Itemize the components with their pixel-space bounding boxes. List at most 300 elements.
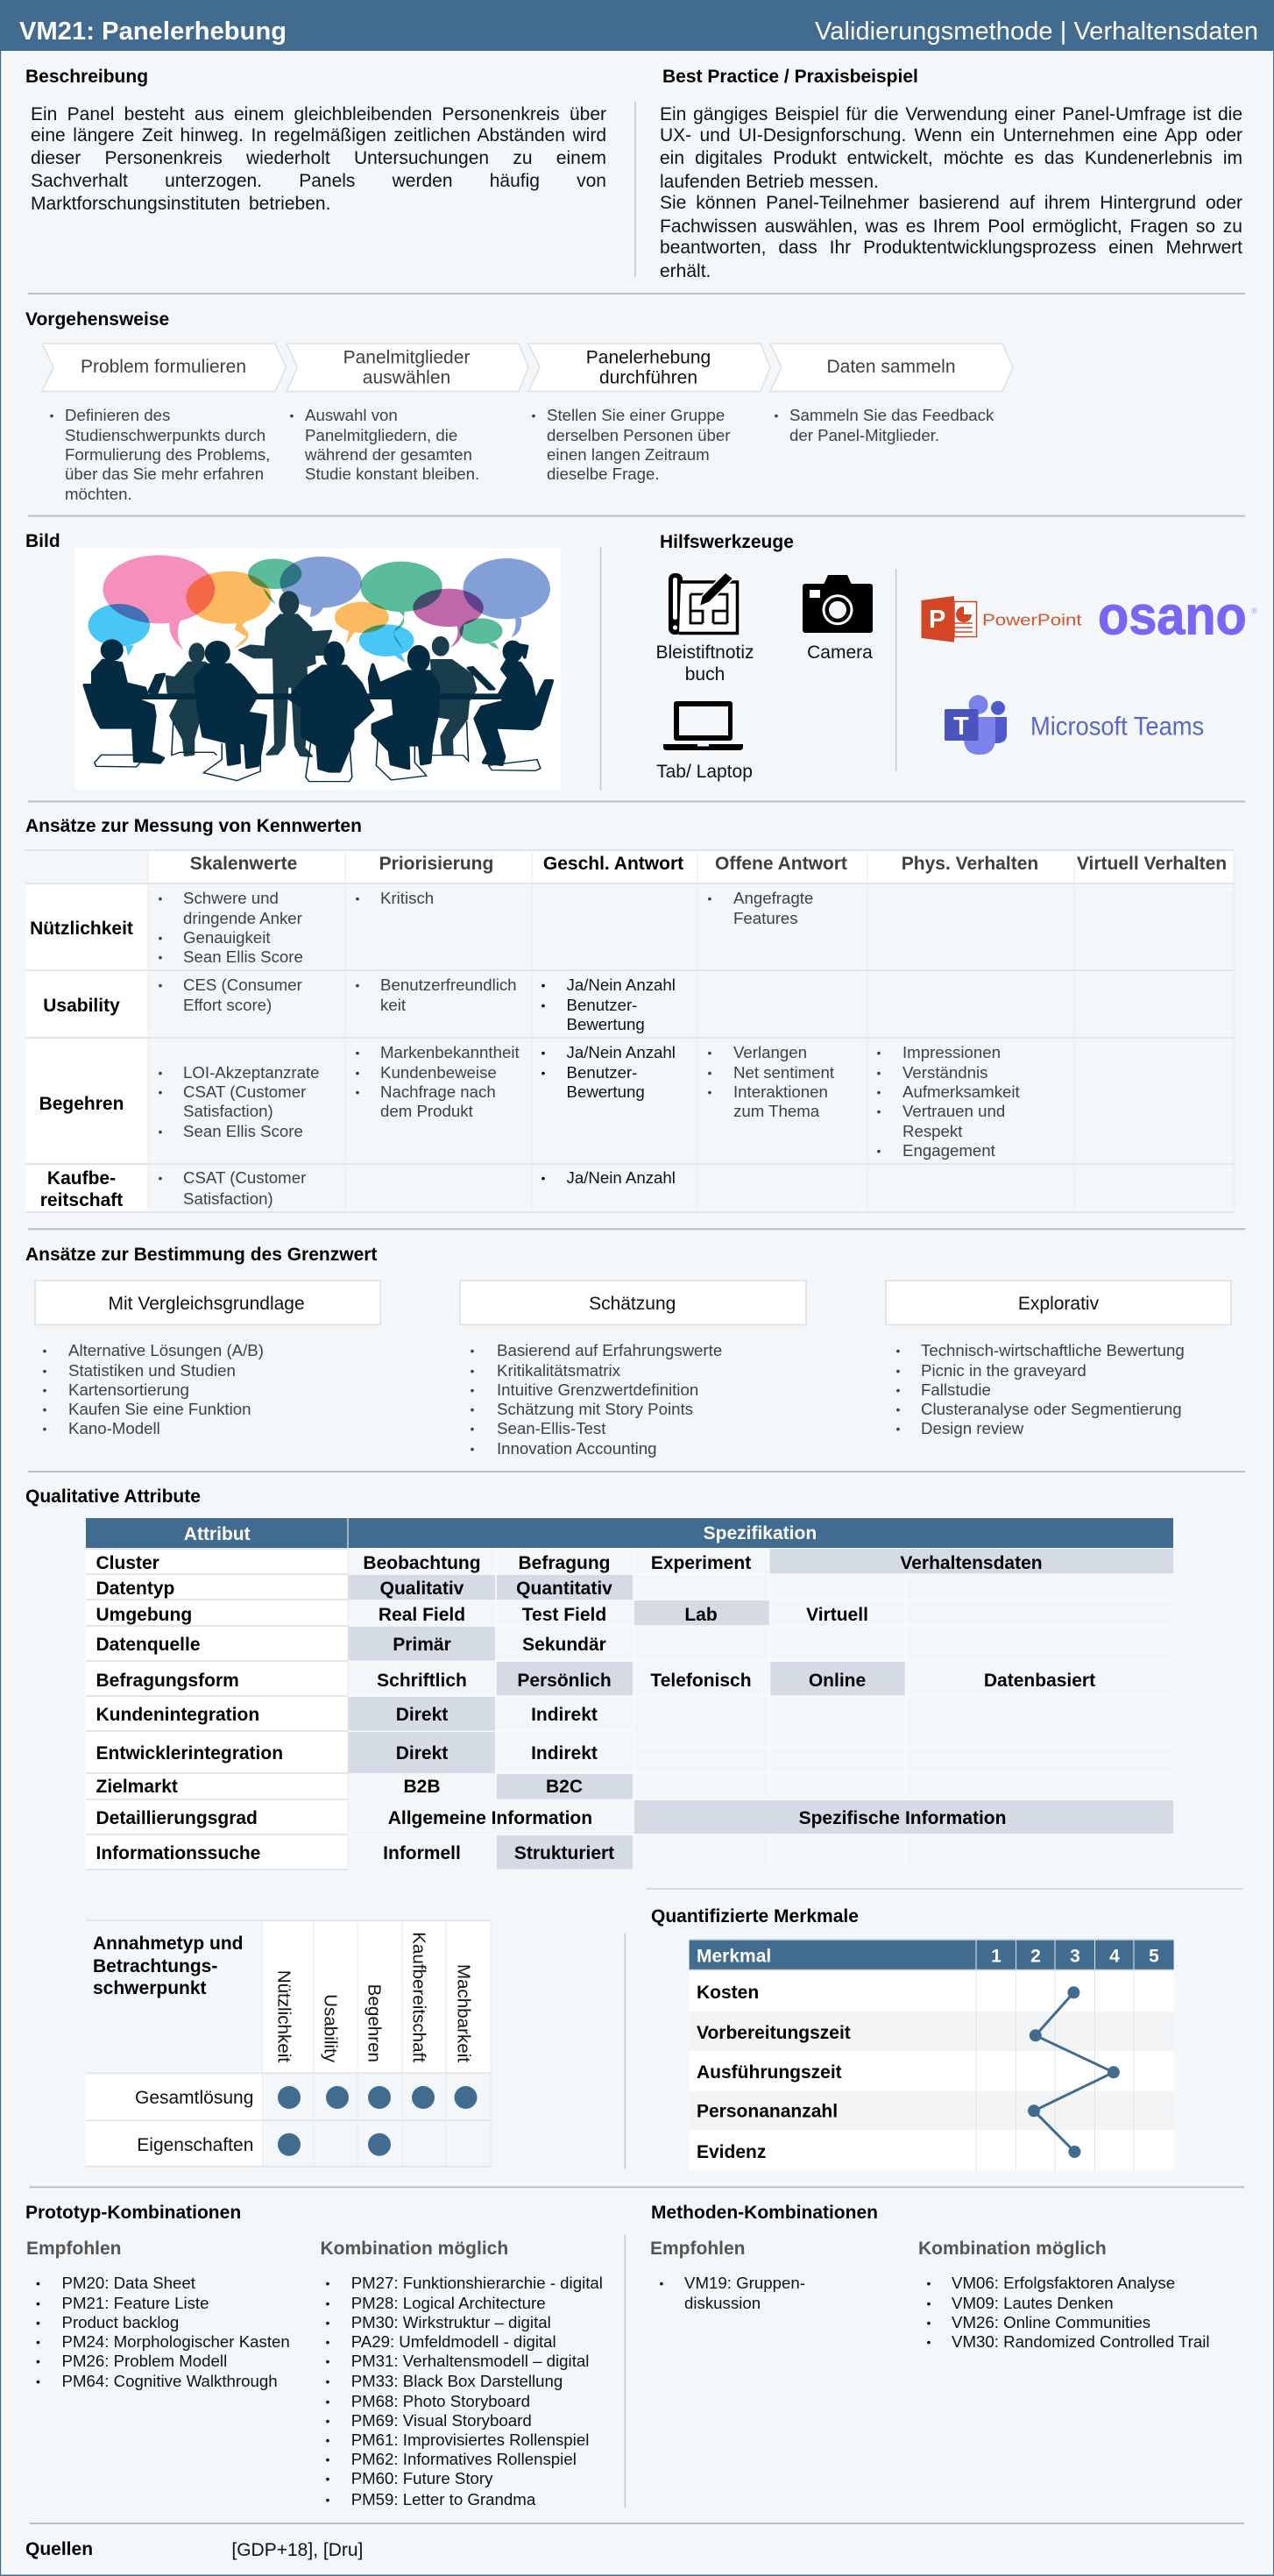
process chevrons: Problem formulieren xyxy=(81,357,246,377)
table: measurement approaches: Verlangen xyxy=(733,1043,807,1061)
list: Kombination möglich: • xyxy=(326,2452,329,2466)
table: measurement approaches: Benutzer- xyxy=(566,1063,637,1082)
table: attributes and specifications: Strukturiert xyxy=(514,1843,614,1863)
table: measurement approaches: Ja/Nein Anzahl xyxy=(566,1168,676,1187)
list: Kombination möglich: • xyxy=(326,2493,329,2507)
table: attributes and specifications: Datentyp xyxy=(96,1579,174,1599)
label: Bleistiftnotizbuch: Bleistiftnotiz xyxy=(655,642,754,663)
column: Explorativ: Explorativ xyxy=(1018,1294,1100,1314)
illustration: meeting silhouettes with speech bubbles xyxy=(75,548,561,790)
table: attributes and specifications: Indirekt xyxy=(531,1705,598,1725)
panel: Quantifizierte Merkmale xyxy=(651,1906,1174,2171)
column: Explorativ: Clusteranalyse oder Segmentierung xyxy=(921,1400,1182,1418)
column: Explorativ xyxy=(886,1281,1231,1437)
table: measurement approaches: dringende Anker xyxy=(183,909,302,927)
header bar xyxy=(0,0,1274,51)
list: Kombination möglich: VM09: Lautes Denken xyxy=(952,2294,1114,2312)
column: Schätzung xyxy=(460,1281,806,1458)
table: measurement approaches: • xyxy=(158,950,163,964)
table: attributes and specifications: Sekundär xyxy=(522,1635,606,1655)
column: Schätzung: • xyxy=(470,1383,475,1397)
column: Explorativ: • xyxy=(895,1422,901,1436)
table: attributes and specifications: Direkt xyxy=(396,1705,448,1725)
table: measurement approaches: Sean Ellis Score xyxy=(183,1122,303,1140)
table: attributes and specifications: Spezifische Information xyxy=(799,1808,1006,1828)
logo: Microsoft Teams xyxy=(945,695,1204,755)
step details: Auswahl von xyxy=(305,406,398,424)
table: attributes and specifications: Primär xyxy=(393,1635,451,1655)
step details: während der gesamten xyxy=(304,445,472,464)
list: Kombination möglich: PM28: Logical Architecture xyxy=(351,2294,546,2312)
table: measurement approaches: • xyxy=(541,978,545,992)
row: Gesamtlösung: Gesamtlösung xyxy=(135,2088,253,2108)
list: Kombination möglich: • xyxy=(927,2335,931,2349)
chart table: Merkmal ratings: Evidenz xyxy=(697,2142,766,2162)
table: measurement approaches: • xyxy=(356,1066,359,1080)
list: Empfohlen: VM19: Gruppen- xyxy=(684,2274,805,2292)
table: measurement approaches: Virtuell Verhalten xyxy=(1077,854,1227,874)
table: measurement approaches: Effort score) xyxy=(183,996,272,1014)
table: measurement approaches: Sean Ellis Score xyxy=(183,947,303,966)
table: measurement approaches: Satisfaction) xyxy=(183,1102,273,1120)
logo: Microsoft Teams: T xyxy=(953,713,969,741)
column: Schätzung: • xyxy=(470,1364,475,1378)
table: attributes and specifications: Qualitativ xyxy=(380,1579,464,1599)
row: Gesamtlösung xyxy=(135,2086,477,2109)
panel: Beschreibung: dieser Personenkreis wiederholt Untersuchungen zu einem xyxy=(31,148,606,168)
heading: Ansätze zur Bestimmung: Ansätze zur Bestimmung des Grenzwert xyxy=(25,1245,377,1265)
table: measurement approaches: Markenbekanntheit xyxy=(380,1043,520,1061)
table: attributes and specifications: Real Field xyxy=(379,1605,465,1625)
table: measurement approaches: • xyxy=(876,1066,881,1080)
column: Schätzung: • xyxy=(470,1442,475,1456)
panel: Beschreibung: Marktforschungsinstituten xyxy=(31,194,240,214)
panel: Bild xyxy=(25,531,561,790)
rotated column labels: Nützlichkeit xyxy=(273,1970,294,2062)
label: Camera: Camera xyxy=(807,642,873,663)
step details: Formulierung des Problems, xyxy=(65,445,270,464)
list: Empfohlen: diskussion xyxy=(684,2294,761,2312)
table: attributes and specifications: Quantitativ xyxy=(516,1579,612,1599)
list: Kombination möglich: • xyxy=(326,2335,329,2349)
list: Kombination möglich: • xyxy=(326,2414,329,2428)
table: measurement approaches: Skalenwerte xyxy=(190,854,297,874)
list: Kombination möglich xyxy=(321,2239,603,2509)
icon: blueprint notebook xyxy=(669,572,738,635)
step details: möchten. xyxy=(65,485,132,503)
table: measurement approaches: • xyxy=(158,931,163,945)
table: attributes and specifications: Kundenintegration xyxy=(96,1705,259,1725)
list: Empfohlen: Product backlog xyxy=(61,2313,179,2331)
list: Empfohlen: Empfohlen xyxy=(26,2239,121,2259)
chart table: Merkmal ratings: 2 xyxy=(1030,1946,1041,1967)
table: measurement approaches: dem Produkt xyxy=(380,1102,474,1120)
table: attributes and specifications: Datenbasiert xyxy=(984,1671,1095,1691)
table: attributes and specifications: Umgebung xyxy=(96,1605,192,1625)
column: Mit Vergleichsgrundlage: Kartensortierung xyxy=(68,1380,189,1399)
table: attributes and specifications: Detaillierungsgrad xyxy=(96,1808,258,1828)
step details: • xyxy=(775,408,778,422)
table: measurement approaches: Benutzerfreundlich xyxy=(380,976,517,994)
table: attributes and specifications: Schriftlich xyxy=(377,1671,467,1691)
column: Mit Vergleichsgrundlage: • xyxy=(42,1402,47,1416)
table: attributes and specifications: Attribut xyxy=(184,1524,251,1544)
table: measurement approaches: Verständnis xyxy=(902,1063,988,1082)
list: Kombination möglich: VM06: Erfolgsfaktoren Analyse xyxy=(952,2274,1175,2292)
column: Mit Vergleichsgrundlage: • xyxy=(42,1422,47,1436)
table: measurement approaches: Schwere und xyxy=(183,889,279,907)
column: Mit Vergleichsgrundlage: • xyxy=(42,1344,47,1358)
label: Bleistiftnotizbuch: buch xyxy=(685,664,725,685)
table: attributes and specifications: Experiment xyxy=(651,1553,751,1573)
table: attributes and specifications: Datenquelle xyxy=(96,1635,201,1655)
table: attributes and specifications: Befragung xyxy=(519,1553,610,1573)
header bar: Validierungsmethode | Verhaltensdaten xyxy=(815,18,1258,46)
icon: laptop xyxy=(663,701,743,750)
table: measurement approaches: CSAT (Customer xyxy=(183,1082,306,1101)
step details xyxy=(49,406,994,503)
table: attributes and specifications: Lab xyxy=(684,1605,718,1625)
step details: • xyxy=(531,408,536,422)
column: Schätzung: Kritikalitätsmatrix xyxy=(497,1361,621,1380)
process chevrons: durchführen xyxy=(599,368,697,387)
list: Kombination möglich: • xyxy=(326,2296,329,2310)
table: measurement approaches: reitschaft xyxy=(40,1190,123,1210)
list: Kombination möglich: • xyxy=(326,2316,329,2330)
step details: einen langen Zeitraum xyxy=(547,445,710,464)
table title: Betrachtungs- xyxy=(93,1956,217,1976)
panel: Beschreibung: Beschreibung xyxy=(25,67,148,87)
list: Empfohlen: PM24: Morphologischer Kasten xyxy=(61,2332,290,2351)
panel: Quellen: Quellen xyxy=(25,2539,93,2559)
list: Kombination möglich: • xyxy=(927,2276,931,2290)
table: measurement approaches: • xyxy=(541,1046,545,1060)
table title xyxy=(93,1934,244,1998)
step details: Studienschwerpunkts durch xyxy=(65,426,265,444)
list: Empfohlen: • xyxy=(36,2276,40,2290)
list: Kombination möglich: • xyxy=(326,2395,329,2409)
step details: der Panel-Mitglieder. xyxy=(789,426,939,444)
column: Schätzung: • xyxy=(470,1422,475,1436)
chart table: Merkmal ratings xyxy=(690,1940,1174,2171)
logo: PowerPoint xyxy=(922,596,1082,642)
panel: Best Practice: Ein gängiges Beispiel für die Verwendung einer Panel-Umfrage ist die xyxy=(660,104,1242,124)
row: Eigenschaften: Eigenschaften xyxy=(137,2135,253,2155)
heading: Quantifizierte Merkmale: Quantifizierte Merkmale xyxy=(651,1906,859,1927)
list: Kombination möglich: Kombination möglich xyxy=(918,2239,1107,2259)
table: measurement approaches: Genauigkeit xyxy=(183,928,271,947)
list: Empfohlen: • xyxy=(36,2374,40,2388)
list: Empfohlen: PM20: Data Sheet xyxy=(61,2274,196,2292)
list: Kombination möglich: PM59: Letter to Grandma xyxy=(351,2490,536,2509)
rotated column labels: Machbarkeit xyxy=(454,1964,473,2062)
panel: Best Practice: Best Practice / Praxisbeispiel xyxy=(662,67,918,87)
chart table: Merkmal ratings: 3 xyxy=(1070,1946,1080,1967)
table: measurement approaches: Net sentiment xyxy=(733,1063,835,1082)
list: Kombination möglich: PA29: Umfeldmodell - digital xyxy=(351,2332,556,2351)
column: Mit Vergleichsgrundlage: Kaufen Sie eine Funktion xyxy=(68,1400,251,1418)
process chevrons: Panelmitglieder xyxy=(343,347,470,368)
table: measurement approaches: Phys. Verhalten xyxy=(902,854,1038,874)
list: Kombination möglich: • xyxy=(326,2374,329,2388)
chart table: Merkmal ratings: 5 xyxy=(1149,1946,1159,1967)
table: attributes and specifications: Entwicklerintegration xyxy=(96,1743,283,1763)
panel: Quellen xyxy=(25,2539,363,2560)
table: measurement approaches: Kundenbeweise xyxy=(380,1063,497,1082)
table: measurement approaches: • xyxy=(158,978,163,992)
chart table: Merkmal ratings: Kosten xyxy=(697,1983,759,2003)
table title: Annahmetyp und xyxy=(93,1934,244,1954)
table: measurement approaches: keit xyxy=(380,996,407,1014)
table: measurement approaches: CSAT (Customer xyxy=(183,1168,306,1187)
heading: Qualitative Attribute: Qualitative Attribute xyxy=(25,1487,201,1507)
table: measurement approaches: Nachfrage nach xyxy=(380,1082,496,1101)
process chevrons: Panelerhebung xyxy=(586,347,711,368)
list: Empfohlen xyxy=(26,2239,290,2390)
list: Kombination möglich: Kombination möglich xyxy=(321,2239,508,2259)
panel: Ansätze zur Messung von Kennwerten xyxy=(25,816,1234,1212)
table: attributes and specifications: Beobachtung xyxy=(363,1553,481,1573)
panel: Best Practice: laufenden Betrieb messen. xyxy=(660,172,879,192)
column: Explorativ: • xyxy=(895,1364,901,1378)
process chevrons: Daten sammeln xyxy=(826,357,956,377)
column: Schätzung: Sean-Ellis-Test xyxy=(497,1419,606,1437)
list: Kombination möglich: • xyxy=(326,2472,329,2486)
list: Empfohlen: • xyxy=(36,2335,40,2349)
table: measurement approaches: • xyxy=(541,1066,545,1080)
column: Explorativ: • xyxy=(895,1402,901,1416)
list: Kombination möglich xyxy=(918,2239,1209,2351)
step details: dieselbe Frage. xyxy=(547,465,660,483)
table: measurement approaches: Vertrauen und xyxy=(902,1102,1005,1120)
table: measurement approaches: • xyxy=(876,1085,881,1099)
panel: Qualitative Attribute xyxy=(25,1487,1173,1870)
panel: Beschreibung xyxy=(25,67,606,214)
list: Kombination möglich: • xyxy=(927,2316,931,2330)
panel: Ansätze zur Bestimmung des Grenzwert xyxy=(25,1245,1231,1458)
heading: Hilfswerkzeuge: Hilfswerkzeuge xyxy=(660,532,794,552)
list: Kombination möglich: PM33: Black Box Darstellung xyxy=(351,2372,563,2390)
panel: Annahmetyp und Betrachtungsschwerpunkt xyxy=(86,1920,491,2167)
heading: Prototyp-Kombinationen: Prototyp-Kombinationen xyxy=(25,2203,241,2223)
table: measurement approaches: Usability xyxy=(43,996,120,1016)
column: Explorativ: • xyxy=(895,1383,901,1397)
table: measurement approaches: • xyxy=(708,1085,711,1099)
table: measurement approaches: • xyxy=(356,978,359,992)
process chevrons: auswählen xyxy=(363,368,450,387)
table: attributes and specifications: Informell xyxy=(383,1843,461,1863)
column: Schätzung: • xyxy=(470,1344,475,1358)
table: measurement approaches: Nützlichkeit xyxy=(30,919,133,939)
list: Kombination möglich: PM62: Informatives Rollenspiel xyxy=(351,2450,577,2468)
column: Mit Vergleichsgrundlage xyxy=(35,1281,380,1437)
table: measurement approaches: • xyxy=(708,891,711,905)
label: Tab/ Laptop: Tab/ Laptop xyxy=(656,762,753,782)
table: measurement approaches: • xyxy=(356,891,359,905)
chart table: Merkmal ratings: Personananzahl xyxy=(697,2102,838,2122)
table: measurement approaches: Begehren xyxy=(39,1094,124,1114)
heading: Vorgehensweise: Vorgehensweise xyxy=(25,309,169,330)
list: Empfohlen: Empfohlen xyxy=(650,2239,745,2259)
column: Mit Vergleichsgrundlage: • xyxy=(42,1364,47,1378)
table: attributes and specifications: Verhaltensdaten xyxy=(900,1553,1043,1573)
header bar: VM21: Panelerhebung xyxy=(19,18,287,46)
column: Explorativ: Picnic in the graveyard xyxy=(921,1361,1086,1380)
list: Empfohlen: • xyxy=(659,2276,664,2290)
list: Empfohlen: PM21: Feature Liste xyxy=(61,2294,209,2312)
panel: Hilfswerkzeuge xyxy=(655,532,873,782)
logo: PowerPoint: PowerPoint xyxy=(982,612,1082,629)
column: Explorativ: • xyxy=(895,1344,901,1358)
panel: Best Practice: ein digitales Produkt entwickelt, möchte es das Kundenerlebnis im xyxy=(660,148,1242,168)
column: Mit Vergleichsgrundlage: Mit Vergleichsgrundlage xyxy=(109,1294,305,1314)
column: Schätzung: Intuitive Grenzwertdefinition xyxy=(497,1380,698,1399)
logo: Microsoft Teams: Microsoft Teams xyxy=(1030,712,1204,742)
table: attributes and specifications: Test Field xyxy=(522,1605,606,1625)
table: measurement approaches: Features xyxy=(733,909,798,927)
logo: osano: ® xyxy=(1251,607,1257,615)
logo: PowerPoint: P xyxy=(929,606,945,634)
table: measurement approaches: Offene Antwort xyxy=(715,854,847,874)
step details: über das Sie mehr erfahren xyxy=(65,465,264,483)
table: measurement approaches: Satisfaction) xyxy=(183,1189,273,1208)
logo: osano: osano xyxy=(1098,585,1247,646)
table: attributes and specifications: Allgemeine Information xyxy=(388,1808,592,1828)
table: measurement approaches: Respekt xyxy=(902,1122,963,1140)
panel: Beschreibung: Sachverhalt unterzogen. Panels werden häufig von xyxy=(31,171,606,191)
step details: Studie konstant bleiben. xyxy=(305,465,479,483)
panel: Quellen: [GDP+18], [Dru] xyxy=(231,2540,363,2560)
list: Kombination möglich: PM69: Visual Storyboard xyxy=(351,2411,532,2430)
table: measurement approaches: • xyxy=(158,1085,163,1099)
table: attributes and specifications: Online xyxy=(809,1671,866,1691)
list: Kombination möglich: PM31: Verhaltensmodell – digital xyxy=(351,2352,589,2370)
line chart xyxy=(1028,1986,1120,2158)
list: Kombination möglich: • xyxy=(326,2276,329,2290)
panel: Best Practice: erhält. xyxy=(660,261,711,281)
column: Mit Vergleichsgrundlage: Alternative Lösungen (A/B) xyxy=(68,1341,264,1359)
heading: Bild: Bild xyxy=(25,531,60,551)
table: measurement approaches: • xyxy=(876,1104,881,1118)
rotated column labels: Begehren xyxy=(365,1984,384,2062)
panel: Beschreibung: eine längere Zeit hinweg. In regelmäßigen zeitlichen Abständen wird xyxy=(31,125,606,145)
step details: • xyxy=(289,408,294,422)
table: measurement approaches: Angefragte xyxy=(733,889,813,907)
panel: Best Practice: beantworten, dass Ihr Produktentwicklungsprozess einen Mehrwert xyxy=(660,238,1242,258)
panel: Best Practice xyxy=(660,67,1242,281)
panel: Best Practice: Sie können Panel-Teilnehmer basierend auf ihrem Hintergrund oder xyxy=(660,193,1242,213)
table: measurement approaches: Bewertung xyxy=(566,1015,645,1033)
panel: Beschreibung: Ein Panel besteht aus einem gleichbleibenden Personenkreis über xyxy=(31,104,606,124)
chart table: Merkmal ratings: 1 xyxy=(991,1946,1002,1967)
table: attributes and specifications: Persönlich xyxy=(517,1671,612,1691)
list: Kombination möglich: PM30: Wirkstruktur – digital xyxy=(351,2313,551,2331)
column: Schätzung: Schätzung xyxy=(589,1294,676,1314)
list: Empfohlen: PM26: Problem Modell xyxy=(61,2352,227,2370)
list: Kombination möglich: PM60: Future Story xyxy=(351,2469,493,2487)
column: Schätzung: Basierend auf Erfahrungswerte xyxy=(497,1341,722,1359)
table: attributes and specifications: B2C xyxy=(546,1777,583,1797)
step details: • xyxy=(49,408,54,422)
table: attributes and specifications: Spezifikation xyxy=(704,1523,817,1543)
table: measurement approaches: Ja/Nein Anzahl xyxy=(566,1043,676,1061)
column: Schätzung: Innovation Accounting xyxy=(497,1439,657,1458)
list: Empfohlen xyxy=(650,2239,805,2312)
column: Explorativ: Fallstudie xyxy=(921,1380,991,1399)
list: Kombination möglich: PM27: Funktionshierarchie - digital xyxy=(351,2274,603,2292)
table: measurement approaches: LOI-Akzeptanzrate xyxy=(183,1063,320,1082)
rotated column labels: Usability xyxy=(321,1994,340,2063)
process chevrons xyxy=(42,344,1013,392)
list: Empfohlen: • xyxy=(36,2316,40,2330)
step details: derselben Personen über xyxy=(547,426,731,444)
chart table: Merkmal ratings: Merkmal xyxy=(697,1946,771,1967)
step details: Sammeln Sie das Feedback xyxy=(789,406,994,424)
table: measurement approaches: Priorisierung xyxy=(379,854,493,874)
panel: Best Practice: UX- und UI-Designforschung. Wenn ein Unternehmen eine App oder xyxy=(660,125,1242,145)
table: measurement approaches: • xyxy=(158,1125,163,1139)
table: measurement approaches: • xyxy=(876,1144,881,1158)
table: measurement approaches: Kritisch xyxy=(380,889,434,907)
table: measurement approaches: • xyxy=(158,891,163,905)
table: measurement approaches: • xyxy=(541,1171,545,1185)
table: measurement approaches: • xyxy=(708,1066,711,1080)
list: Kombination möglich: PM61: Improvisiertes Rollenspiel xyxy=(351,2431,589,2449)
panel: Vorgehensweise xyxy=(25,309,1013,503)
table: measurement approaches: Kaufbe- xyxy=(47,1168,116,1189)
table: measurement approaches: • xyxy=(158,1171,163,1185)
step details: Definieren des xyxy=(65,406,170,424)
panel: Best Practice: Fachwissen auswählen, was es Ihrem Pool ermöglicht, Fragen so zu xyxy=(660,216,1242,237)
list: Kombination möglich: • xyxy=(326,2354,329,2368)
column: Explorativ: Technisch-wirtschaftliche Bewertung xyxy=(921,1341,1185,1359)
table: attributes and specifications: Telefonisch xyxy=(650,1671,752,1691)
column: Schätzung: Schätzung mit Story Points xyxy=(497,1400,693,1418)
panel: Methoden-Kombinationen xyxy=(650,2203,1209,2351)
column: Mit Vergleichsgrundlage: • xyxy=(42,1383,47,1397)
column: Mit Vergleichsgrundlage: Kano-Modell xyxy=(68,1419,160,1437)
table: measurement approaches: • xyxy=(708,1046,711,1060)
table: attributes and specifications: Befragungsform xyxy=(96,1671,239,1691)
list: Kombination möglich: VM26: Online Communities xyxy=(952,2313,1150,2331)
list: Empfohlen: • xyxy=(36,2296,40,2310)
chart table: Merkmal ratings: Ausführungszeit xyxy=(697,2062,842,2083)
table: measurement approaches: • xyxy=(876,1046,881,1060)
table: attributes and specifications: Direkt xyxy=(396,1743,448,1763)
table: measurement approaches: Bewertung xyxy=(566,1082,645,1101)
icon: camera xyxy=(803,575,873,633)
table: measurement approaches: Aufmerksamkeit xyxy=(902,1082,1021,1101)
step details: Panelmitgliedern, die xyxy=(305,426,457,444)
label: Bleistiftnotizbuch xyxy=(655,642,754,685)
column: Schätzung: • xyxy=(470,1402,475,1416)
rotated column labels xyxy=(273,1932,473,2063)
list: Empfohlen: • xyxy=(36,2354,40,2368)
table: attributes and specifications: B2B xyxy=(403,1777,441,1797)
panel: Beschreibung: betrieben. xyxy=(249,194,330,214)
list: Kombination möglich: • xyxy=(927,2296,931,2310)
table: attributes and specifications: Zielmarkt xyxy=(96,1777,178,1797)
table: measurement approaches: Interaktionen xyxy=(733,1082,828,1101)
table: measurement approaches: • xyxy=(158,1066,163,1080)
table: measurement approaches xyxy=(25,850,1234,1212)
table: measurement approaches: Benutzer- xyxy=(566,996,637,1014)
rotated column labels: Kaufbereitschaft xyxy=(408,1932,429,2062)
chart table: Merkmal ratings: Vorbereitungszeit xyxy=(697,2023,851,2043)
table: measurement approaches: Ja/Nein Anzahl xyxy=(566,976,676,994)
list: Kombination möglich: PM68: Photo Storyboard xyxy=(351,2392,530,2410)
column: Explorativ: Design review xyxy=(921,1419,1024,1437)
